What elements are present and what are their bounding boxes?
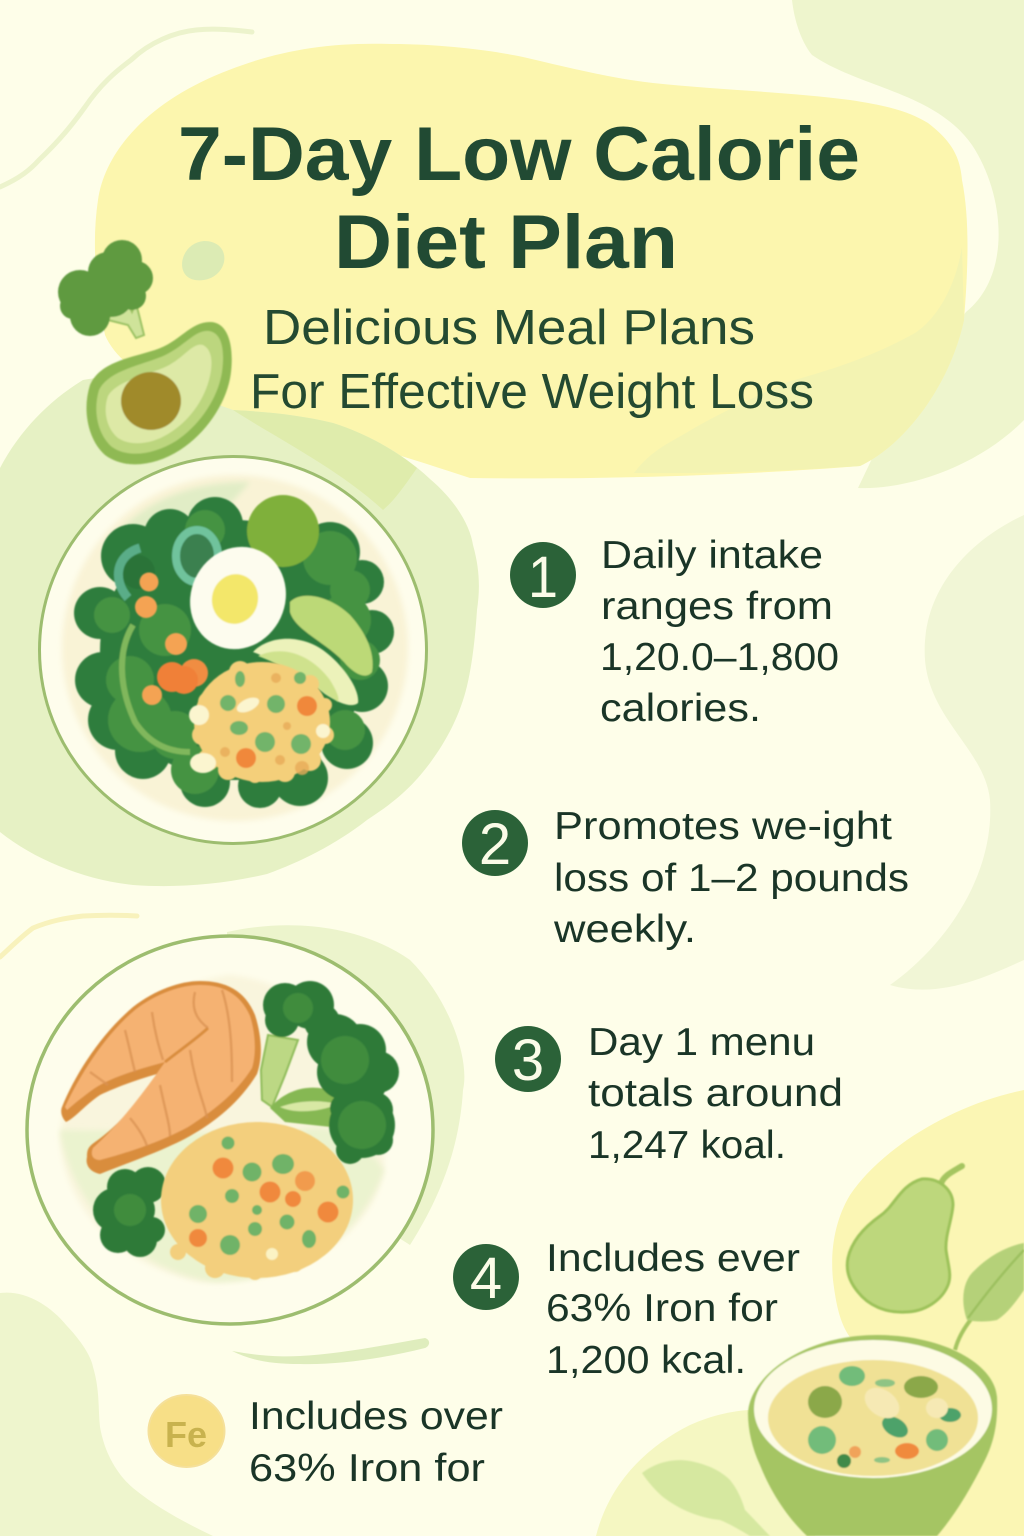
title: 7-Day Low Calorie [178, 112, 860, 197]
icon: leaf sprig [955, 1243, 1024, 1350]
point 2: 2 [479, 812, 511, 877]
egg [173, 531, 303, 665]
key points [453, 534, 909, 1382]
point 3: 1,247 koal. [588, 1124, 786, 1167]
point 1: Daily intake [601, 534, 823, 577]
point 3: totals around [588, 1072, 843, 1115]
point 2: weekly. [553, 908, 696, 951]
point 4: 4 [470, 1246, 502, 1311]
icon: soup bowl [748, 1335, 997, 1536]
salad plate [40, 456, 426, 844]
subtitle [250, 301, 814, 419]
point 1: 1,20.0–1,800 [600, 636, 839, 679]
point 4: 63% Iron for [546, 1287, 778, 1330]
salmon plate [27, 936, 433, 1324]
point 3 [495, 1021, 843, 1167]
point 1 [510, 534, 839, 730]
grain mix [189, 661, 334, 783]
salmon [61, 981, 261, 1174]
plate [27, 936, 433, 1324]
point 4: Includes ever [546, 1237, 800, 1280]
icon: Fe badge [148, 1395, 224, 1467]
subtitle: For Effective Weight Loss [250, 365, 814, 419]
icon: pear [847, 1166, 962, 1312]
point 4 [453, 1237, 800, 1382]
point 2: Promotes we-ight [554, 805, 892, 848]
grain mix [161, 1122, 353, 1280]
icon: bottom leaf [642, 1460, 770, 1536]
broccoli right [261, 981, 399, 1164]
iron badge and note: Includes over [249, 1395, 503, 1438]
point 2: loss of 1–2 pounds [554, 857, 909, 900]
icon: broccoli [58, 240, 153, 338]
title [178, 112, 860, 285]
point 2 [462, 805, 909, 951]
icon: avocado [86, 322, 232, 464]
avocado slice [253, 639, 358, 705]
plate [40, 456, 426, 844]
leafy greens [74, 495, 394, 808]
point 3: 3 [512, 1028, 544, 1093]
subtitle: Delicious Meal Plans [263, 301, 755, 355]
iron badge and note: 63% Iron for [249, 1447, 485, 1490]
point 4: 1,200 kcal. [546, 1339, 746, 1382]
iron badge and note [148, 1395, 503, 1490]
icon: Fe badge: Fe [165, 1414, 207, 1455]
broccoli left [93, 1167, 166, 1257]
carrots [135, 572, 208, 705]
point 1: ranges from [601, 585, 833, 628]
point 3: Day 1 menu [588, 1021, 815, 1064]
point 1: 1 [528, 545, 558, 610]
point 1: calories. [600, 687, 761, 730]
title: Diet Plan [334, 200, 678, 285]
